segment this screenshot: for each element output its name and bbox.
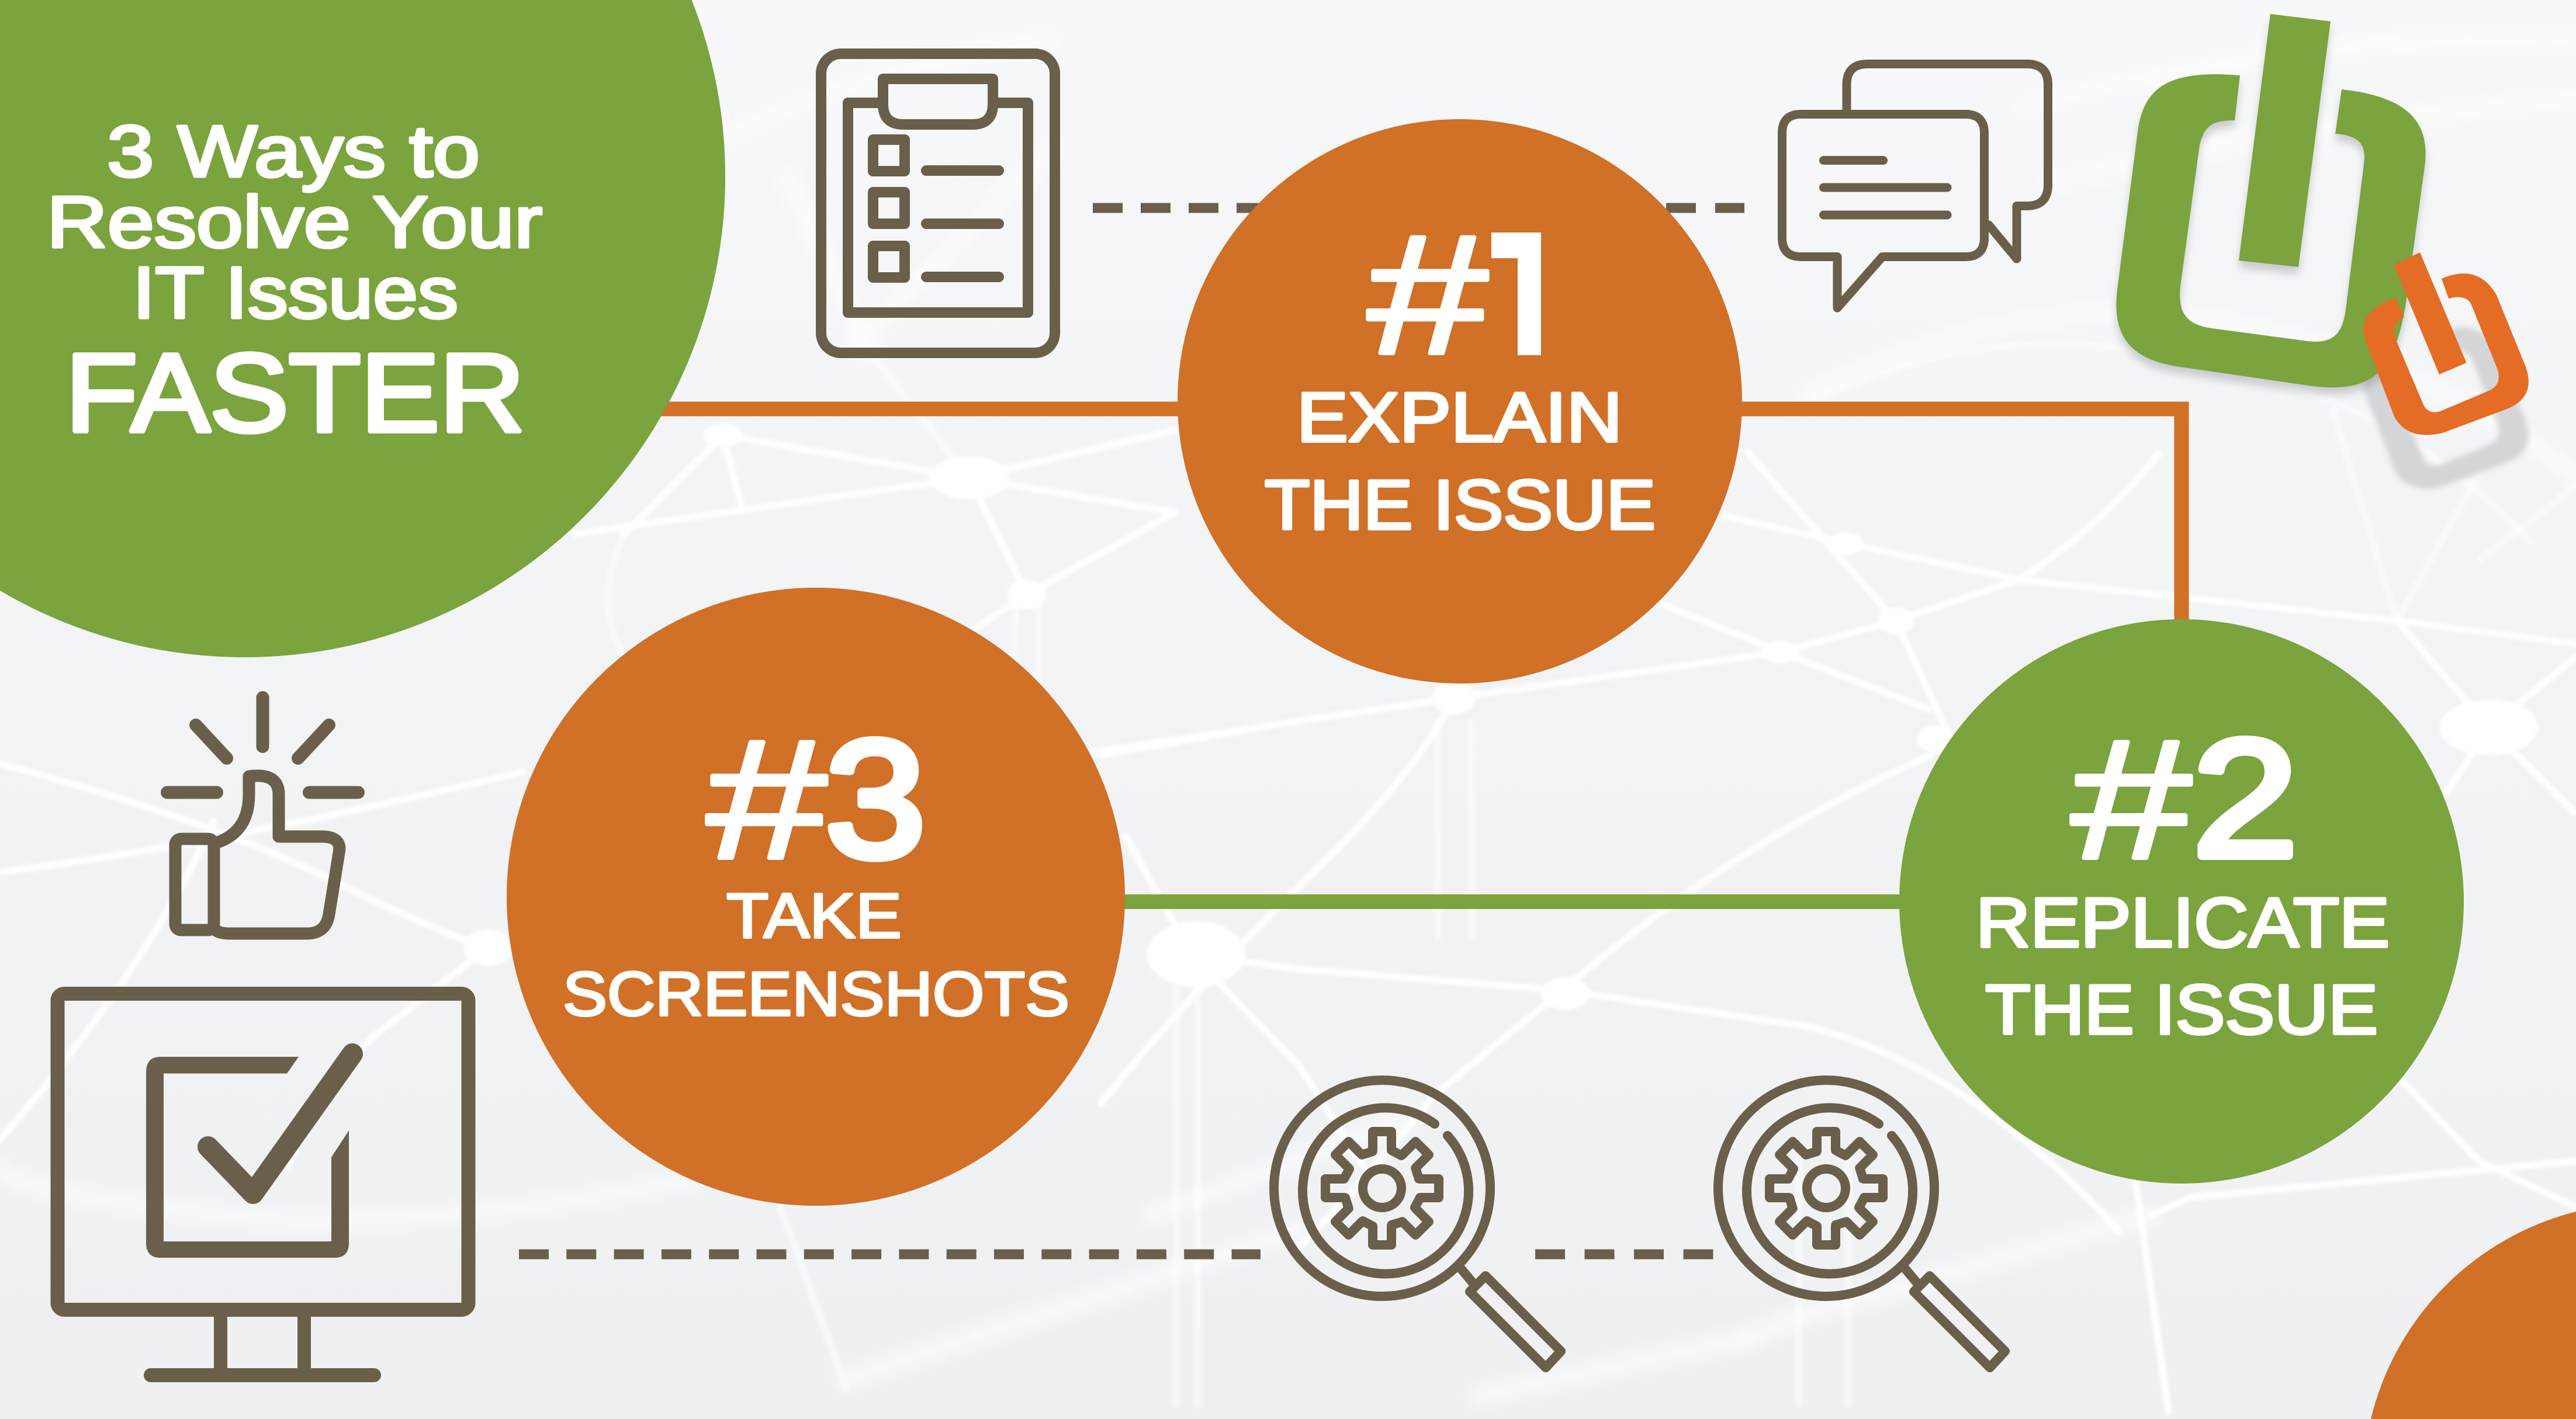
panel: step 2 circle: [1899, 619, 2464, 1184]
step 3 number: #: [707, 705, 828, 894]
icon: chat bubbles: [1782, 64, 2048, 308]
connector: orange line from title through step 1 to step 2: [643, 409, 2182, 643]
title text: 3 Ways to: [107, 111, 480, 192]
step 2 label: REPLICATE: [1976, 883, 2390, 962]
step 1 label: THE ISSUE: [1265, 466, 1656, 544]
step 1 label: EXPLAIN: [1297, 379, 1622, 457]
icon: thumbs up: [167, 698, 358, 934]
step 2 number: [2071, 705, 2298, 894]
panel: step 3 circle: [507, 588, 1125, 1206]
dashed connector: clipboard to chat bubbles: [1093, 203, 1744, 213]
panel: step 1 circle: [1178, 119, 1742, 684]
step 3 number: 3: [825, 706, 926, 892]
logo: green power icon: [2116, 14, 2426, 387]
title text: [47, 111, 542, 455]
icon: magnifier with gear, right: [1718, 1080, 2005, 1368]
icon: monitor with check mark: [57, 994, 469, 1375]
logo: orange power icon: [2363, 252, 2529, 435]
title text: IT Issues: [133, 252, 458, 334]
step 3 label: [563, 880, 1069, 1029]
logo: orange icon shadow: [2363, 327, 2529, 488]
icon: magnifier with gear, left: [1274, 1080, 1561, 1368]
title text: FASTER: [65, 331, 525, 455]
step 2 number: 2: [2193, 706, 2298, 891]
title text: Resolve Your: [47, 182, 542, 263]
step 1 number: 1: [1478, 201, 1571, 387]
step 1 label: [1265, 379, 1656, 544]
step 3 number: [707, 705, 926, 894]
panel: title circle: [0, 0, 725, 657]
step 2 label: [1976, 883, 2390, 1049]
connector: green line between step 2 and step 3: [1110, 894, 1917, 909]
icon: clipboard checklist: [821, 54, 1055, 353]
step 1 number: [1367, 200, 1578, 389]
decorative corner circle: [2371, 1212, 2576, 1419]
step 1 number: #: [1367, 200, 1489, 389]
step 3 label: SCREENSHOTS: [563, 959, 1069, 1029]
step 2 number: #: [2071, 705, 2193, 894]
step 3 label: TAKE: [726, 880, 902, 952]
step 2 label: THE ISSUE: [1985, 971, 2378, 1049]
dashed connector: monitor to magnifiers: [519, 1249, 1713, 1260]
